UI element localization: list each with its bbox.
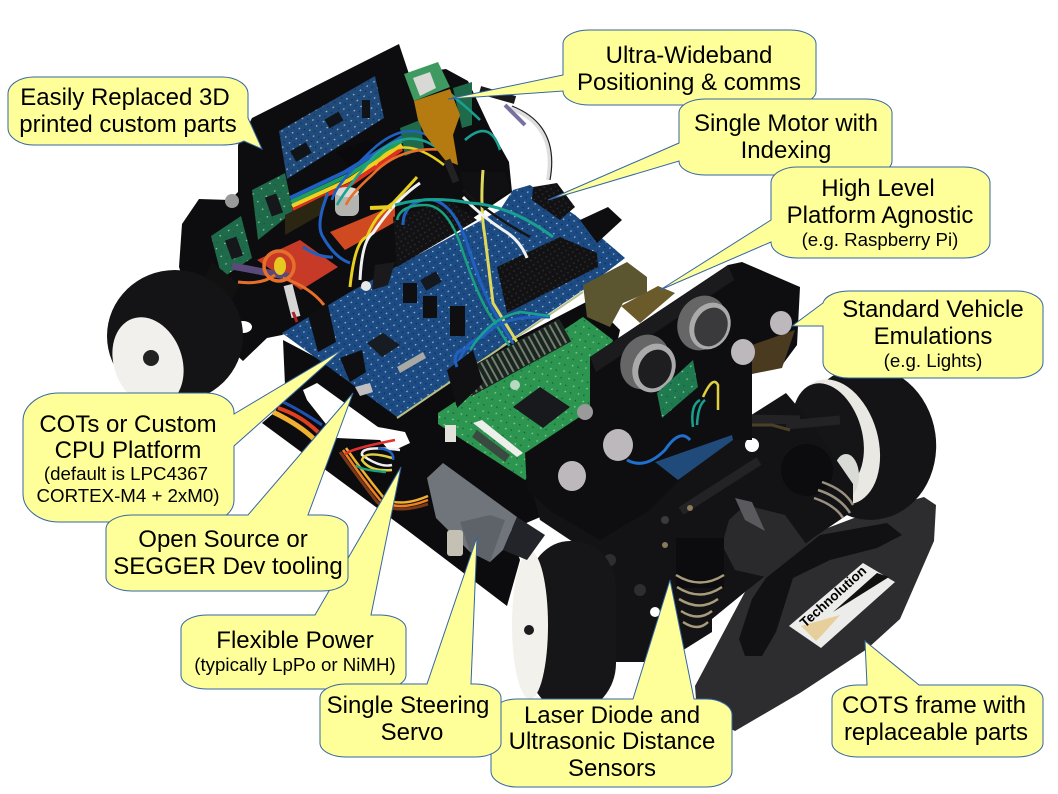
callout: ultra-wideband: Ultra-Wideband [606,42,772,69]
callout: steering servo [320,537,501,757]
front suspension and gearbox [527,393,853,662]
callout: single motor: Single Motor with [694,110,878,137]
callout: COTS frame: COTS frame with [842,692,1026,719]
callout: dev tooling: SEGGER Dev tooling [113,553,343,580]
callout: vehicle emulations: (e.g. Lights) [884,350,982,371]
left shock spring [676,538,724,627]
callout: easily replaced parts: printed custom parts [19,111,237,138]
ethernet and USB connectors [583,262,675,327]
callout: vehicle emulations [792,291,1043,378]
servo and power wires [273,402,428,509]
Technolution logo badge [789,563,895,648]
lower chassis plate [262,300,620,606]
callout: steering servo: Servo [381,719,443,746]
callout: CPU platform [23,349,343,522]
callout: COTS frame: replaceable parts [844,719,1028,746]
red driver board and capacitor [257,187,395,290]
callout: laser and ultrasonic sensors: Sensors [568,755,656,782]
robot car photo illustration [100,44,946,731]
callout: ultra-wideband [448,30,816,105]
grey steering servo [427,463,545,562]
rear 3D printed panel and body [179,44,512,361]
callout: dev tooling: Open Source or [138,526,308,553]
callout: CPU platform: CPU Platform [55,437,201,464]
callout: high level platform: Platform Agnostic [787,202,973,229]
callout: flexible power [181,467,406,689]
main blue CPU board [282,185,625,418]
front 3D printed sensor bracket [525,262,800,540]
callout: flexible power: Flexible Power [216,627,374,654]
callout: COTS frame [832,641,1043,757]
ultrasonic transducers [611,287,738,400]
ultrasonic sensor board on rear panel [279,76,384,179]
callout: dev tooling [106,393,353,591]
Technolution logo badge: Technolution [797,563,869,630]
front left wheel [512,541,616,711]
front right wheel [778,357,946,529]
front bumper [695,497,936,731]
green load cell modules [205,82,472,300]
callout: vehicle emulations: Emulations [874,323,992,350]
callout: high level platform: (e.g. Raspberry Pi) [802,229,958,250]
callout: single motor: Indexing [741,137,831,164]
callout: laser and ultrasonic sensors: Ultrasonic Distance [509,728,715,755]
callout: CPU platform: (default is LPC4367 [44,463,208,484]
bumper mount arm [739,523,902,656]
black header sockets [372,172,622,313]
rear left wheel [100,270,243,417]
callout: steering servo: Single Steering [327,692,489,719]
right shock spring [781,444,853,518]
small sensor board with wires on front bracket [627,360,733,480]
callout: single motor [548,99,892,200]
raspberry pi board [438,317,613,480]
callout: vehicle emulations: Standard Vehicle [842,296,1024,323]
callout: high level platform: High Level [821,175,935,202]
cut-out in the chassis plate [303,383,410,450]
ultra-wideband module on kapton tape [404,62,460,182]
orange loop wire and grey bundle [232,251,324,322]
callout: CPU platform: CORTEX-M4 + 2xM0) [37,485,219,506]
callout: ultra-wideband: Positioning & comms [577,69,801,96]
coloured jumper wires [303,90,553,367]
callout: easily replaced parts [8,77,262,149]
callout: CPU platform: COTs or Custom [39,411,217,438]
callout: easily replaced parts: Easily Replaced 3D [20,84,230,111]
callout: high level platform [660,167,990,290]
translucent vehicle LEDs [558,311,792,491]
callout: flexible power: (typically LpPo or NiMH) [194,654,396,675]
callout: laser and ultrasonic sensors [491,580,732,787]
callout: laser and ultrasonic sensors: Laser Diode and [524,702,700,729]
flat rainbow ribbon wires [290,137,402,210]
